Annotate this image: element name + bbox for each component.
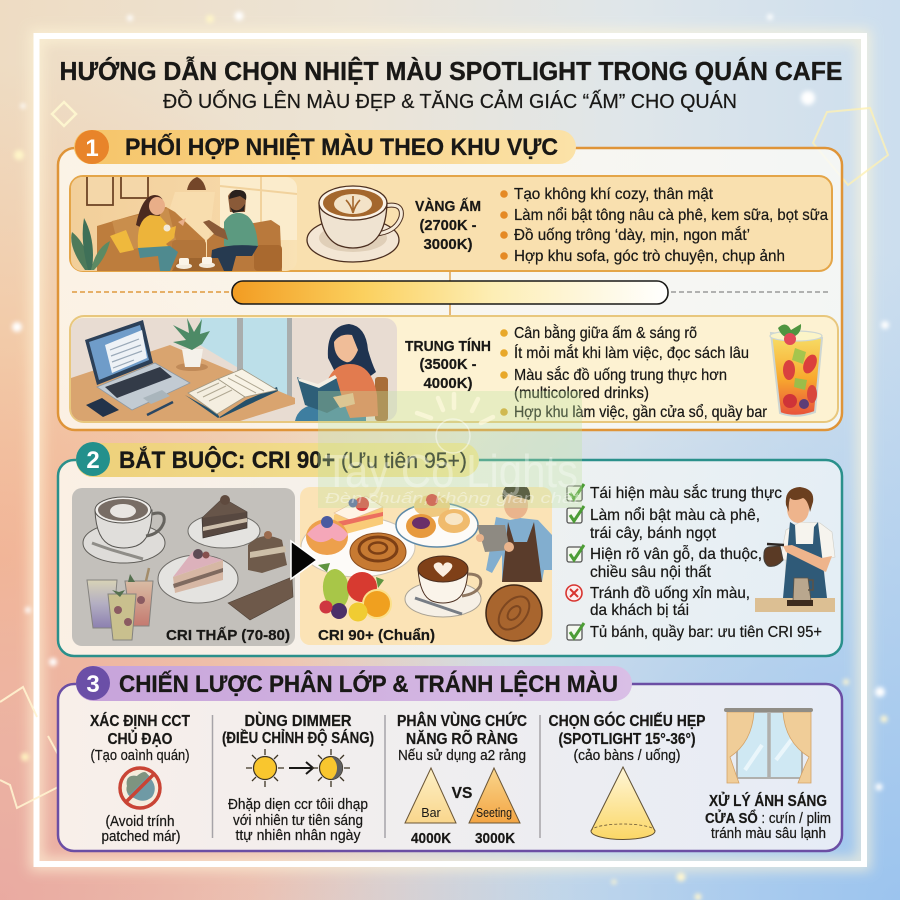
check item 1: Tái hiện màu sắc trung thực — [590, 483, 782, 502]
column: main CCT: (Tạo oaình quán) — [90, 748, 190, 764]
versus label: VS — [452, 785, 472, 802]
title: HƯỚNG DẪN CHỌN NHIỆT MÀU SPOTLIGHT TRONG QUÁN CAFE — [60, 56, 842, 86]
check item 2 — [567, 506, 760, 542]
warm bullet list: Đồ uống trông ‘dày, mịn, ngon mắt’ — [514, 225, 750, 244]
section 1 heading pill: PHỐI HỢP NHIỆT MÀU THEO KHU VỰC — [125, 133, 558, 161]
watermark: Đèn chuẩn, không gian chất — [325, 490, 580, 507]
warm row background — [70, 176, 832, 271]
column: dimmer — [222, 712, 374, 844]
icon: bar light cone: Bar — [421, 806, 441, 820]
neutral bullet list: Cân bằng giữa ấm & sáng rõ — [514, 323, 697, 342]
neutral row background — [70, 316, 838, 422]
column: main CCT: (Avoid trính — [106, 814, 174, 830]
icon: seating light cone: Seeting — [476, 806, 512, 820]
column: dimmer: DÙNG DIMMER — [244, 712, 352, 730]
column: window light: CỬA SỔ : cưín / plim — [705, 809, 831, 827]
section 2 heading pill: BẮT BUỘC: CRI 90+ — [119, 446, 335, 474]
check item 2: trái cây, bánh ngọt — [590, 525, 717, 542]
warning item — [566, 585, 750, 619]
column: window light: XỬ LÝ ÁNH SÁNG — [709, 792, 827, 810]
warm bullet list: Hợp khu sofa, góc trò chuyện, chụp ảnh — [514, 248, 785, 265]
color temperature gradient bar — [72, 271, 830, 316]
warm label: (2700K - — [420, 217, 477, 234]
icon: window with curtains — [724, 708, 813, 783]
column: main CCT: XÁC ĐỊNH CCT — [90, 713, 190, 730]
column: window light: tránh màu sâu lạnh — [711, 826, 826, 842]
check item 3: Hiện rõ vân gỗ, da thuộc, — [590, 544, 762, 563]
check item 2: Làm nổi bật màu cà phê, — [590, 506, 760, 524]
warm bullet list — [500, 186, 828, 265]
column: functional zoning: NĂNG RÕ RÀNG — [406, 730, 518, 748]
section 3 heading pill: CHIẾN LƯỢC PHÂN LỚP & TRÁNH LỆCH MÀU — [119, 670, 618, 698]
check item 3: chiều sâu nội thất — [590, 564, 712, 581]
icon: spotlight cone — [591, 767, 655, 840]
neutral bullet list: Ít mỏi mắt khi làm việc, đọc sách lâu — [514, 343, 749, 362]
column: main CCT: patched már) — [102, 829, 180, 845]
neutral bullet list: Màu sắc đồ uống trung thực hơn — [514, 365, 727, 384]
icon: sun to moon dimming — [246, 749, 350, 787]
warm bullet list: Tạo không khí cozy, thân mật — [514, 186, 714, 203]
column: dimmer: Đhặp diẹn ccr tôii dhạp — [228, 797, 368, 813]
icon: bar light cone: 4000K — [411, 830, 451, 847]
neutral label — [405, 338, 491, 392]
column: main CCT — [90, 713, 190, 845]
column: window light — [705, 708, 831, 842]
neutral bullet list: Hợp khu làm việc, gần cửa sổ, quầy bar — [514, 403, 768, 421]
watermark — [318, 391, 582, 508]
warm label: 3000K) — [424, 236, 472, 253]
neutral label: (3500K - — [420, 356, 477, 373]
section 1 heading pill: 1 — [85, 135, 99, 162]
warning item: Tránh đồ uống xỉn màu, — [590, 585, 750, 602]
column: functional zoning: Nếu sử dụng a2 rảng — [398, 748, 526, 764]
column: dimmer: (ĐIỀU CHỈNH ĐỘ SÁNG) — [222, 729, 374, 747]
column: dimmer: với nhiên tư tiên sáng — [233, 813, 363, 829]
column dividers — [212, 715, 540, 838]
section 3 heading pill — [76, 666, 632, 701]
column: dimmer: ttự nhiên nhân ngày — [236, 828, 361, 844]
check item 4: Tủ bánh, quầy bar: ưu tiên CRI 95+ — [590, 624, 822, 641]
icon: barista pouring coffee — [755, 487, 835, 612]
section 2 heading pill: (Ưu tiên 95+) — [341, 448, 467, 473]
section 2 heading pill: 2 — [86, 447, 100, 474]
subtitle: ĐỒ UỐNG LÊN MÀU ĐẸP & TĂNG CẢM GIÁC “ẤM” CHO QUÁN — [163, 89, 737, 113]
check item 3 — [567, 544, 762, 581]
column: narrow beam — [548, 712, 706, 840]
column: functional zoning — [397, 712, 527, 847]
section 3 heading pill: 3 — [86, 671, 100, 698]
neutral label: TRUNG TÍNH — [405, 338, 491, 355]
illustration: laptop, book and reader — [71, 318, 397, 421]
column: functional zoning: PHÂN VÙNG CHỨC — [397, 712, 527, 730]
section 2 heading pill — [76, 442, 479, 477]
high CRI food image — [300, 483, 552, 645]
icon: bar light cone — [405, 768, 456, 847]
illustration: couple on sofa — [71, 175, 297, 271]
column: main CCT: CHỦ ĐẠO — [108, 730, 172, 748]
column: narrow beam: (cảo bàns / uống) — [574, 748, 680, 764]
icon: fruit drink — [770, 324, 822, 416]
watermark: Tay Co Lights — [324, 445, 578, 497]
low CRI caption: CRI THẤP (70-80) — [166, 627, 290, 644]
column: narrow beam: CHỌN GÓC CHIẾU HẸP — [548, 712, 706, 730]
warm label: VÀNG ẤM — [415, 198, 481, 215]
warm bullet list: Làm nổi bật tông nâu cà phê, kem sữa, bọt sữa — [514, 206, 828, 224]
low CRI food image — [72, 488, 295, 646]
high CRI caption: CRI 90+ (Chuẩn) — [318, 627, 435, 644]
CRI benefit checklist — [566, 483, 822, 641]
neutral bullet list — [500, 323, 768, 421]
comparison arrow — [291, 541, 317, 579]
neutral label: 4000K) — [424, 375, 472, 392]
neutral bullet list: (multicolored drinks) — [514, 385, 649, 402]
column: narrow beam: (SPOTLIGHT 15°-36°) — [558, 731, 696, 748]
icon: latte cup — [307, 186, 401, 262]
panel 3: layering strategy — [58, 666, 842, 851]
warm label — [415, 198, 481, 253]
icon: seating light cone — [469, 768, 520, 847]
icon: no patchy light — [120, 768, 160, 808]
icon: seating light cone: 3000K — [475, 830, 515, 847]
warning item: da khách bị tái — [590, 602, 689, 619]
panel 2: CRI requirement — [58, 442, 842, 656]
panel 1: color temperature by zone — [58, 130, 842, 430]
